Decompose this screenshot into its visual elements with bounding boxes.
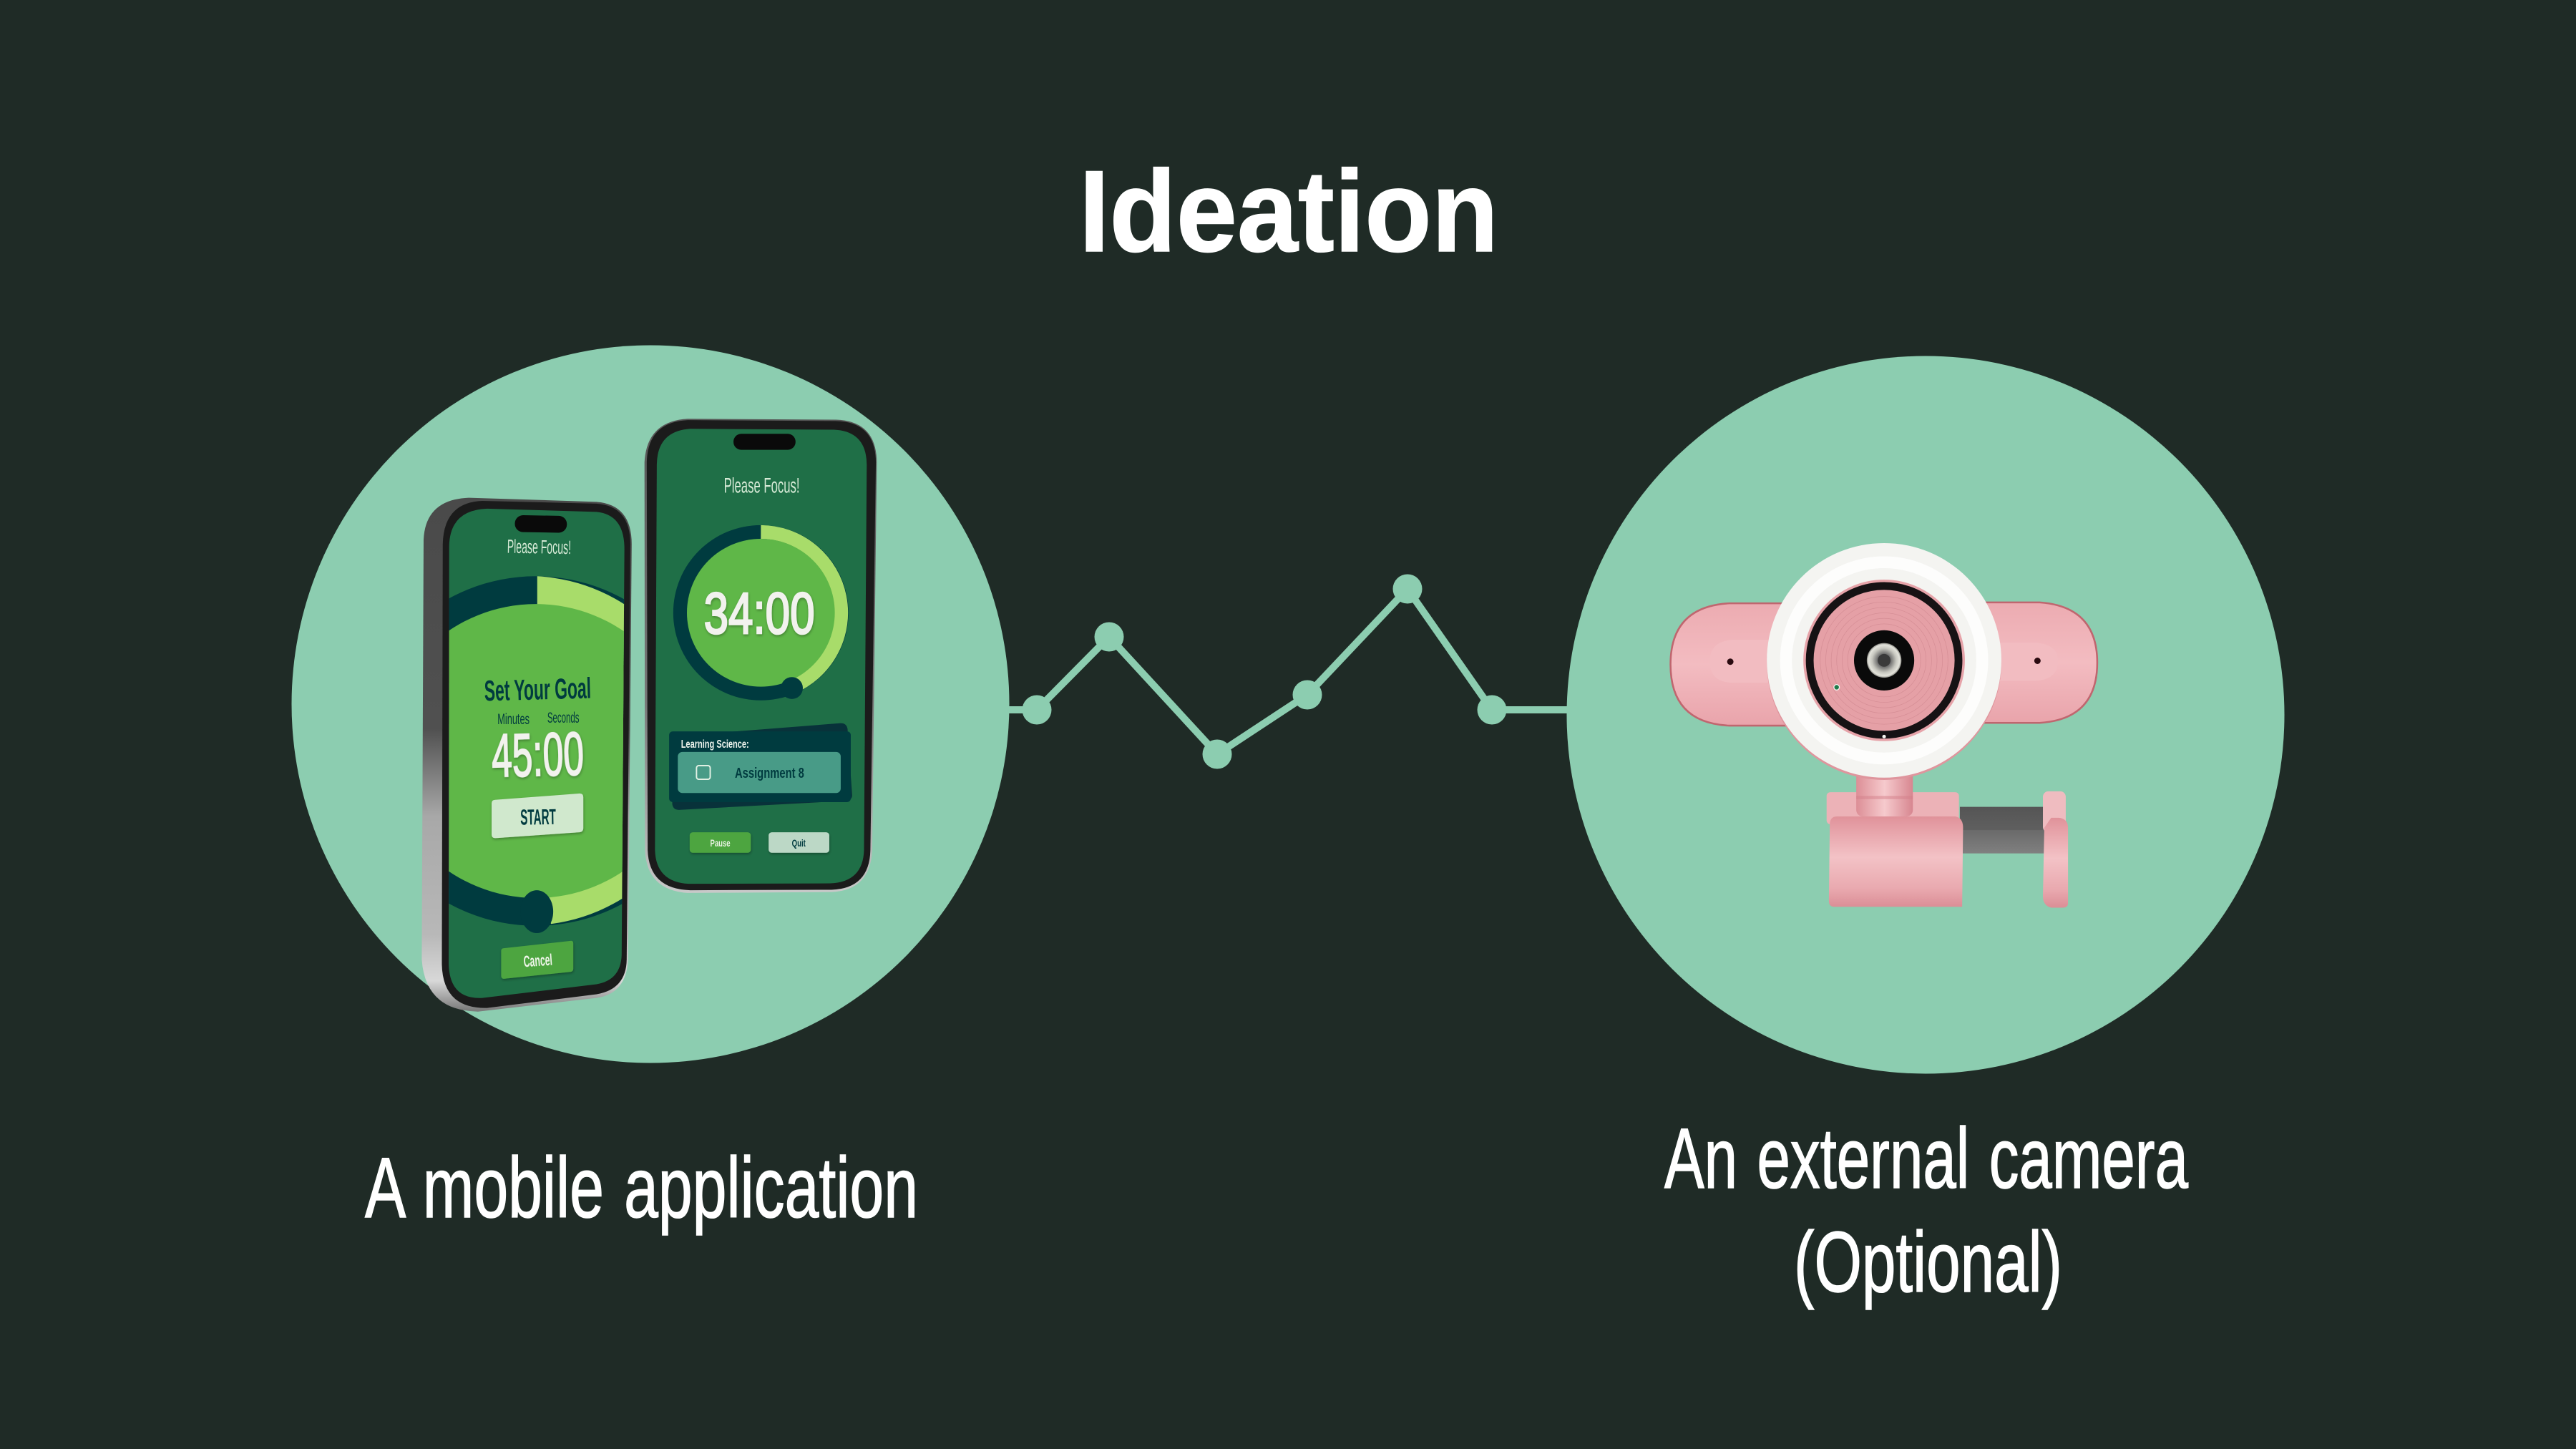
phone: focus timer screen: Assignment 8: [735, 766, 804, 781]
phone: set your goal screen: Minutes: [497, 711, 530, 728]
webcam body wings: [1671, 602, 2097, 726]
title: Ideation: [1079, 147, 1498, 276]
phone: set your goal screen: START: [520, 805, 556, 830]
phone: focus timer screen: Quit: [792, 837, 806, 849]
webcam clamp base: [1827, 771, 2068, 908]
panel: external camera circle: [1567, 356, 2284, 1073]
connector line chart between the circles: [1005, 574, 1571, 769]
phone: set your goal screen: Seconds: [547, 710, 579, 726]
label: mobile application: A mobile application: [365, 1140, 918, 1236]
illustration: webcam: [1671, 543, 2097, 908]
webcam ring light and lens: [1767, 543, 2001, 780]
phone: set your goal screen: Set Your Goal: [484, 672, 592, 707]
phone: focus timer screen: Learning Science:: [681, 738, 749, 751]
label: optional: (Optional): [1794, 1214, 2062, 1310]
phone: set your goal screen: Please Focus!: [507, 536, 571, 558]
phone: set your goal screen: [422, 498, 632, 1012]
phone: focus timer screen: [645, 419, 877, 893]
label: external camera: An external camera: [1664, 1111, 2188, 1206]
phone: focus timer screen: 34:00: [704, 581, 815, 646]
illustration: two phones: [422, 419, 877, 1012]
phone: set your goal screen: 45:00: [491, 720, 585, 791]
phone: focus timer screen: Pause: [711, 837, 731, 849]
panel: mobile application circle: [292, 345, 1009, 1063]
phone: focus timer screen: Please Focus!: [724, 474, 800, 498]
phone: set your goal screen: Cancel: [523, 951, 553, 970]
